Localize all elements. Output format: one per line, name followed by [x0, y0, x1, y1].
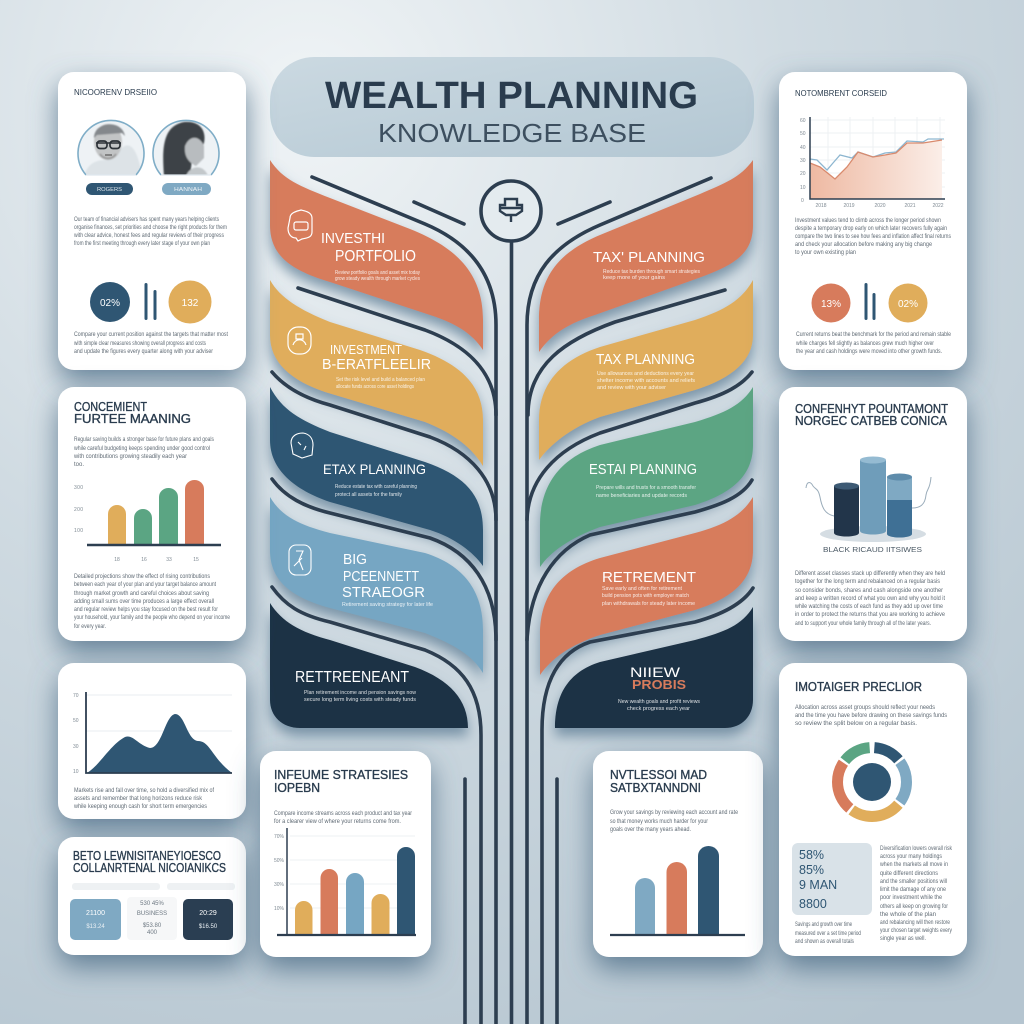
text block lower: Compare your current position against the targets that matter most	[74, 332, 228, 338]
leaf: right dark	[555, 607, 753, 728]
area chart: 30	[73, 744, 79, 750]
name pill: light	[162, 183, 211, 195]
leaf labels: right yellow: shelter income with accounts and reliefs	[597, 378, 695, 384]
heading: CONCEMIENT	[74, 400, 147, 414]
text block: and to support your whole family through all of the later years.	[795, 621, 931, 627]
stat circle: yellow	[168, 280, 212, 324]
text block: Different asset classes stack up differently when they are held	[795, 571, 945, 577]
text block lower	[73, 332, 228, 355]
text block	[73, 788, 214, 810]
line chart: 60	[800, 118, 806, 124]
text block: right column: and the smaller positions will	[880, 879, 947, 885]
leaf labels: right yellow: TAX PLANNING	[596, 351, 695, 368]
text block	[610, 810, 739, 833]
bar chart	[610, 846, 745, 935]
leaf labels: right orange: TAX' PLANNING	[593, 249, 705, 266]
heading: INFEUME STRATESIES	[274, 768, 408, 782]
text block: so that money works much harder for your	[610, 819, 708, 825]
icon: plant	[289, 545, 311, 575]
leaf labels: left dark: secure long term living costs with steady funds	[304, 697, 416, 703]
leaf labels: right green: name beneficiaries and update records	[596, 493, 687, 499]
line chart: 2022	[932, 203, 944, 209]
leaf: left dark	[270, 603, 468, 728]
text block: Markets rise and fall over time, so hold a diversified mix of	[74, 788, 214, 794]
avatar: man	[78, 115, 144, 176]
heading: NICOORENV DRSEIIO	[74, 87, 157, 97]
bar chart: 16	[141, 557, 147, 563]
leaf labels: left navy: Reduce estate tax with careful planning	[335, 484, 417, 490]
panel: savings chart	[593, 751, 763, 957]
leaf labels: left yellow: INVESTMENT	[330, 342, 402, 357]
leaf labels: right dark	[618, 664, 700, 712]
stat box: blue: 21100	[86, 910, 105, 917]
text block: in order to protect the returns that you are working to achieve	[795, 612, 946, 618]
text block: to your own existing plan	[795, 250, 856, 256]
stat circle: dark	[90, 282, 130, 322]
line chart: 2021	[904, 203, 916, 209]
text block: Grow your savings by reviewing each account and rate	[610, 810, 739, 816]
bar chart: 200	[74, 507, 83, 513]
stat box: dark: 20:29	[199, 910, 217, 917]
leaf labels: left dark	[295, 669, 416, 703]
leaf labels: right orange: Reduce tax burden through smart strategies	[603, 269, 700, 275]
text block: while watching the costs of each fund as they add up over time	[794, 604, 944, 610]
text block: and keep a written record of what you own and why you hold it	[795, 596, 945, 602]
leaf labels: left light blue: STRAEOGR	[342, 584, 425, 601]
leaf: right green	[540, 387, 753, 567]
leaf: right orange	[539, 160, 753, 352]
bar chart	[274, 828, 416, 935]
heading: IMOTAIGER PRECLIOR	[795, 680, 922, 694]
stat box: white: 400	[147, 930, 158, 936]
text block: under box: measured over a set time period	[795, 931, 861, 937]
divider bars	[144, 283, 156, 320]
leaf labels: left dark: Plan retirement income and pension savings now	[304, 690, 416, 696]
caption: BLACK RICAUD IITSIWES	[823, 545, 922, 554]
text block: compare the two lines to see how fees and inflation affect final returns	[795, 234, 951, 240]
text block	[73, 437, 214, 468]
leaf labels: right yellow	[596, 351, 695, 391]
bar chart: 10%	[274, 906, 285, 912]
leaf: left orange	[270, 160, 483, 350]
text block: Regular saving builds a stronger base for future plans and goals	[74, 437, 214, 443]
text block: with clear advice, honest fees and regular reviews of their progress	[73, 233, 224, 239]
leaf labels: left light blue: BIG	[343, 551, 367, 568]
heading	[73, 849, 226, 875]
text block	[795, 705, 947, 727]
area chart: 10	[73, 769, 79, 775]
text block: and the time you have before drawing on these savings funds	[795, 713, 947, 719]
text block lower: Current returns beat the benchmark for the period and remain stable	[796, 332, 952, 338]
text block: goals over the many years ahead.	[610, 827, 691, 833]
line chart	[800, 117, 945, 209]
avatar: woman	[153, 115, 219, 176]
text block: under box: and shown as overall totals	[795, 939, 854, 945]
leaf labels: right orange lower	[602, 569, 696, 607]
area chart: 50	[73, 718, 79, 724]
text block: right column	[879, 846, 953, 942]
leaf labels: right orange lower: RETREMENT	[602, 569, 696, 586]
leaf labels: right orange lower: Save early and often for retirement	[602, 586, 682, 592]
text block: for a clearer view of where your returns come from.	[274, 819, 401, 825]
icon: adviser	[288, 327, 311, 354]
leaf labels: left light blue	[289, 545, 433, 608]
icon: head	[291, 433, 313, 458]
text block: under box	[795, 922, 861, 945]
leaf labels: left light blue: PCEENNETT	[343, 568, 419, 585]
panel: donut chart	[779, 663, 967, 956]
title banner	[270, 57, 754, 157]
text block lower: and update the figures every quarter along with your adviser	[74, 349, 213, 355]
leaf labels: right dark: NIIEW	[630, 664, 681, 680]
stat circle: orange	[812, 284, 850, 322]
bar chart	[74, 480, 221, 563]
line chart: 40	[800, 145, 806, 151]
area chart	[73, 692, 232, 775]
text block: together for the long term and rebalanced on a regular basis	[795, 579, 940, 585]
stat box: white: BUSINESS	[137, 911, 167, 917]
stat box: white: 530 45%	[140, 901, 165, 907]
text block lower: adding small sums over time produces a large effect overall	[74, 599, 214, 605]
leaf labels: left orange: PORTFOLIO	[335, 248, 416, 265]
text block: right column: across your many holdings	[880, 854, 942, 860]
line chart: 2018	[815, 203, 827, 209]
text block: assets and remember that long horizons reduce risk	[74, 796, 203, 802]
text block lower: and regular review helps you stay focused on the best result for	[74, 607, 218, 613]
divider bars	[864, 283, 876, 320]
text block: right column: Diversification lowers overall risk	[880, 846, 953, 852]
text block	[73, 217, 227, 247]
text block lower	[795, 332, 952, 355]
icon: portfolio	[288, 210, 312, 241]
panel: income strategies chart	[260, 751, 431, 957]
text block: so review the split below on a regular basis.	[795, 721, 917, 727]
heading: NORGEC CATBEB CONICA	[795, 414, 948, 428]
bar chart: 30%	[274, 882, 285, 888]
leaf labels: right orange lower: build pension pots with employer match	[602, 593, 689, 599]
area chart: 70	[73, 693, 79, 699]
leaf labels: left orange	[288, 210, 420, 282]
text block lower: with simple clear measures showing overall progress and costs	[73, 341, 206, 347]
grey bars	[72, 883, 235, 890]
panel: area chart	[58, 663, 246, 819]
bar chart: 70%	[274, 834, 285, 840]
bar chart: 300	[74, 485, 83, 491]
text block: Compare income streams across each product and tax year	[274, 811, 412, 817]
heading: BETO LEWNISITANEYIOESCO	[73, 849, 221, 863]
stat circle: yellow	[888, 284, 928, 322]
text block: Investment values tend to climb across the longer period shown	[795, 218, 941, 224]
heading	[74, 400, 191, 426]
text block: right column: others all keep on growing for	[880, 904, 948, 910]
donut chart	[838, 748, 906, 816]
text block: right column: quite different directions	[880, 871, 938, 877]
text block lower: the year and cash holdings were moved into other growth funds.	[796, 349, 942, 355]
name pill: dark	[86, 183, 133, 195]
text block: and check your allocation before making any big change	[795, 242, 933, 248]
text block: right column: poor investment while the	[880, 895, 943, 901]
leaf labels: right dark: check progress each year	[627, 706, 690, 712]
leaf labels: left navy: ETAX PLANNING	[323, 461, 426, 477]
bar chart: 100	[74, 528, 83, 534]
stat box: white: $53.80	[143, 923, 162, 929]
stat circle: orange: 13%	[821, 299, 841, 310]
text block: Allocation across asset groups should reflect your needs	[795, 705, 935, 711]
leaf: left yellow	[270, 280, 483, 466]
text block	[274, 811, 412, 825]
text block: organise finances, set priorities and choose the right products for them	[74, 225, 227, 231]
leaf labels: right green	[589, 461, 697, 499]
line chart: 20	[800, 171, 806, 177]
leaf labels: right dark: New wealth goals and profit reviews	[618, 699, 700, 705]
panel: concept bar chart	[58, 387, 246, 641]
text block	[794, 571, 946, 627]
stat box: dark: $16.50	[199, 924, 218, 930]
leaf labels: right yellow: Use allowances and deductions every year	[597, 371, 694, 377]
leaf labels: right orange lower: plan withdrawals for steady later income	[602, 601, 695, 607]
leaf: right yellow	[539, 280, 753, 460]
text block: despite a temporary drop early on which later recovers fully again	[795, 226, 947, 232]
stat box: dark	[183, 899, 233, 940]
tree leaves	[270, 160, 753, 728]
text block lower	[74, 574, 231, 630]
name pill: dark: ROGERS	[97, 187, 122, 193]
panel: line chart and stats	[779, 72, 967, 370]
text block	[795, 218, 951, 256]
text block lower: for every year.	[74, 624, 106, 630]
leaf labels: left orange: grow steady wealth through market cycles	[335, 276, 420, 282]
icon: trunk emblem	[481, 181, 541, 241]
heading: COLLANRTENAL NICOIANIKCS	[73, 861, 226, 875]
panel: profiles	[58, 72, 246, 370]
text block: under box: Savings and growth over time	[795, 922, 852, 928]
text block: right column: your chosen target weights every	[880, 928, 952, 934]
stat box: blue	[70, 899, 121, 940]
stat box: white	[127, 897, 177, 940]
text block: too.	[74, 462, 84, 468]
leaf labels: left orange: INVESTHI	[321, 230, 385, 247]
stat circle: dark: 02%	[100, 298, 120, 309]
subtitle: KNOWLEDGE BASE	[378, 118, 646, 148]
bar chart: 50%	[274, 858, 285, 864]
leaf labels: right dark: PROBIS	[632, 677, 686, 692]
text block: Our team of financial advisers has spent many years helping clients	[74, 217, 219, 223]
bar chart: 15	[193, 557, 199, 563]
panel: collateral summary	[58, 837, 246, 955]
heading: IOPEBN	[274, 781, 320, 795]
leaf: right orange lower	[540, 497, 753, 675]
stats box: 9 MAN	[799, 878, 837, 892]
heading	[795, 402, 948, 428]
text block: right column: single year as well.	[880, 936, 926, 942]
heading: FURTEE MAANING	[74, 412, 191, 426]
heading: NVTLESSOI MAD	[610, 768, 707, 782]
text block: from the first meeting through every later stage of your own plan	[74, 241, 210, 247]
heading	[610, 768, 707, 795]
text block lower: while charges fell slightly as balances grew much higher over	[795, 341, 934, 347]
text block: right column: and rebalancing will then restore	[880, 920, 951, 926]
tree branches and trunk	[272, 177, 753, 1024]
line chart: 2020	[874, 203, 886, 209]
text block lower: your household, your family and the people who depend on your income	[74, 615, 231, 621]
leaf labels: left navy: protect all assets for the family	[335, 492, 402, 498]
line chart: 50	[800, 131, 806, 137]
leaf labels: left navy	[291, 433, 426, 498]
text block lower: through market growth and careful choices about saving	[74, 591, 209, 597]
text block: with contributions growing steadily each year	[73, 454, 187, 460]
leaf labels: right orange: keep more of your gains	[603, 275, 665, 281]
leaf: left light blue	[270, 497, 483, 673]
leaf labels: right green: ESTAI PLANNING	[589, 461, 697, 478]
leaf labels: left yellow	[288, 327, 431, 390]
text block: while careful budgeting keeps spending under good control	[73, 446, 210, 452]
main title: WEALTH PLANNING	[325, 75, 698, 117]
name pill: light: HANNAH	[174, 187, 202, 193]
leaf labels: left dark: RETTREENEANT	[295, 669, 409, 686]
stat box: blue: $13.24	[86, 924, 105, 930]
leaf labels: right orange	[593, 249, 705, 281]
stat circle: yellow: 132	[182, 298, 199, 309]
leaf labels: left orange: Review portfolio goals and asset mix today	[335, 270, 420, 276]
stats box	[792, 843, 872, 915]
heading: NOTOMBRENT CORSEID	[795, 88, 887, 98]
text block: right column: when the markets all move in	[879, 862, 948, 868]
text block lower: between each year of your plan and your target balance amount	[74, 582, 216, 588]
bar chart: 18	[114, 557, 120, 563]
leaf labels: left light blue: Retirement saving strategy for later life	[342, 602, 433, 608]
heading: CONFENHYT POUNTAMONT	[795, 402, 948, 416]
text block: right column: the whole of the plan	[880, 912, 936, 918]
line chart: 0	[801, 198, 804, 204]
leaf labels: right green: Prepare wills and trusts for a smooth transfer	[596, 485, 696, 491]
line chart: 2019	[843, 203, 855, 209]
leaf labels: right yellow: and review with your adviser	[597, 385, 666, 391]
stats box: 8800	[799, 897, 827, 911]
stats box: 58%	[799, 848, 824, 862]
text block: right column: limit the damage of any one	[880, 887, 947, 893]
line chart: 10	[800, 185, 806, 191]
stats box: 85%	[799, 863, 824, 877]
bar chart: 33	[166, 557, 172, 563]
leaf: left navy	[270, 387, 483, 566]
text block lower: Detailed projections show the effect of rising contributions	[74, 574, 210, 580]
leaf labels: left yellow: allocate funds across core asset holdings	[336, 384, 414, 390]
heading	[274, 768, 408, 795]
text block: while keeping enough cash for short term emergencies	[73, 804, 207, 810]
panel: cylinder chart	[779, 387, 967, 641]
stat circle: yellow: 02%	[898, 299, 918, 310]
text block: so consider bonds, shares and cash alongside one another	[795, 588, 943, 594]
leaf labels: left yellow: Set the risk level and build a balanced plan	[336, 377, 425, 383]
line chart: 30	[800, 158, 806, 164]
cylinder illustration	[806, 456, 931, 542]
leaf labels: left yellow: B-ERATFLEELIR	[322, 356, 431, 373]
heading: SATBXTANNDNI	[610, 781, 701, 795]
